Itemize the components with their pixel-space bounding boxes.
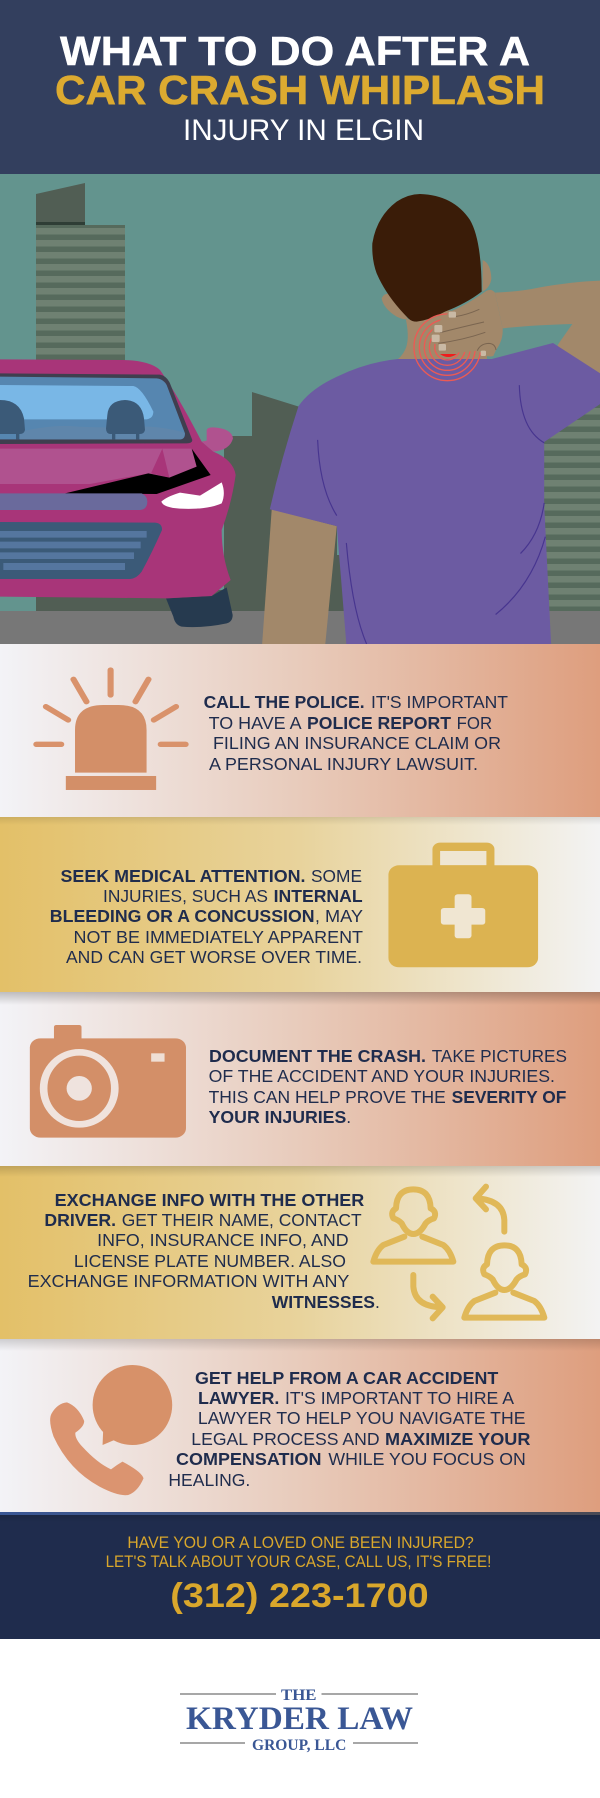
text: document the crash: THIS CAN HELP PROVE THE — [209, 1087, 446, 1107]
text: seek medical attention: SEEK MEDICAL ATTENTION. — [60, 866, 306, 886]
car — [0, 359, 236, 627]
text: call the police: POLICE REPORT — [307, 713, 451, 733]
text: exchange info: LICENSE PLATE NUMBER. ALSO — [74, 1251, 346, 1271]
text: get help: MAXIMIZE YOUR — [385, 1429, 531, 1449]
text: document the crash: . — [346, 1107, 351, 1127]
text: seek medical attention: SOME — [311, 866, 362, 886]
text: seek medical attention: , — [315, 906, 320, 926]
text: get help: LEGAL PROCESS AND — [191, 1429, 380, 1449]
icon: camera — [30, 1025, 186, 1138]
text: call the police: CALL THE POLICE. — [204, 692, 365, 712]
icon: phone and speech bubble — [50, 1365, 172, 1495]
title — [55, 28, 545, 147]
panel 4: exchange info — [0, 1166, 600, 1339]
text: document the crash: TAKE PICTURES — [432, 1046, 567, 1066]
call to action text line 2: LET'S TALK ABOUT YOUR CASE, CALL US, IT'S FREE! — [106, 1553, 491, 1571]
logo: the kryder law group: THE — [281, 1687, 316, 1704]
background buildings — [36, 183, 600, 611]
text: call the police: FOR — [457, 713, 492, 733]
text: exchange info — [28, 1190, 380, 1312]
header panel — [0, 0, 600, 174]
text: seek medical attention: INTERNAL — [274, 886, 363, 906]
text: exchange info: EXCHANGE INFO WITH THE OTHER — [55, 1190, 365, 1210]
logo: the kryder law group — [0, 1639, 600, 1798]
panel 2: seek medical attention — [0, 817, 600, 992]
road — [0, 611, 600, 644]
footer call to action — [0, 1512, 600, 1639]
text: exchange info: GET THEIR NAME, CONTACT — [122, 1210, 362, 1230]
title: CAR CRASH WHIPLASH — [55, 67, 545, 113]
hero illustration — [0, 174, 600, 644]
person holding neck — [262, 194, 600, 644]
text: get help: WHILE YOU FOCUS ON — [328, 1449, 526, 1469]
text: get help: LAWYER TO HELP YOU NAVIGATE THE — [198, 1408, 526, 1428]
text: call the police: TO HAVE A — [209, 713, 302, 733]
hand — [432, 290, 503, 357]
text: seek medical attention: MAY — [325, 906, 363, 926]
call to action text: HAVE YOU OR A LOVED ONE BEEN INJURED? — [127, 1534, 474, 1552]
text: get help: GET HELP FROM A CAR ACCIDENT — [195, 1368, 499, 1388]
text: seek medical attention: BLEEDING OR A CONCUSSION — [50, 906, 315, 926]
text: seek medical attention: NOT BE IMMEDIATELY APPARENT — [74, 927, 363, 947]
text: get help — [168, 1368, 531, 1490]
text: exchange info: DRIVER. — [44, 1210, 116, 1230]
text: document the crash: DOCUMENT THE CRASH. — [209, 1046, 426, 1066]
pain rings — [414, 314, 481, 381]
text: document the crash — [209, 1046, 567, 1127]
text: document the crash: YOUR INJURIES — [209, 1107, 346, 1127]
text: seek medical attention: AND CAN GET WORSE OVER TIME. — [66, 947, 362, 967]
text: call the police: A PERSONAL INJURY LAWSUIT. — [209, 754, 478, 774]
title: INJURY IN ELGIN — [183, 114, 424, 147]
icon: siren — [36, 670, 186, 790]
logo: the kryder law group: KRYDER LAW — [186, 1701, 413, 1737]
text: get help: IT'S IMPORTANT TO HIRE A — [285, 1388, 514, 1408]
icon: first aid kit — [388, 843, 538, 967]
text: call the police — [204, 692, 508, 774]
text: call the police: FILING AN INSURANCE CLAIM OR — [213, 733, 501, 753]
title: WHAT TO DO AFTER A — [60, 28, 530, 74]
text: exchange info: EXCHANGE INFORMATION WITH ANY — [28, 1271, 350, 1291]
text: get help: HEALING. — [168, 1470, 250, 1490]
text: seek medical attention — [50, 866, 363, 967]
icon: two people exchanging — [373, 1187, 544, 1318]
text: exchange info: . — [375, 1292, 380, 1312]
text: seek medical attention: INJURIES, SUCH AS — [103, 886, 268, 906]
text: document the crash: SEVERITY OF — [452, 1087, 567, 1107]
text: get help: LAWYER. — [198, 1388, 279, 1408]
text: exchange info: INFO, INSURANCE INFO, AND — [97, 1230, 349, 1250]
text: get help: COMPENSATION — [176, 1449, 322, 1469]
panel 3: document the crash — [0, 992, 600, 1166]
logo: the kryder law group: GROUP, LLC — [252, 1737, 346, 1754]
panel 5: get help from a lawyer — [0, 1339, 600, 1512]
text: document the crash: OF THE ACCIDENT AND YOUR INJURIES. — [209, 1066, 555, 1086]
text: call the police: IT'S IMPORTANT — [371, 692, 508, 712]
phone number: (312) 223-1700 — [170, 1577, 429, 1615]
text: exchange info: WITNESSES — [272, 1292, 375, 1312]
panel 1: call the police — [0, 644, 600, 817]
